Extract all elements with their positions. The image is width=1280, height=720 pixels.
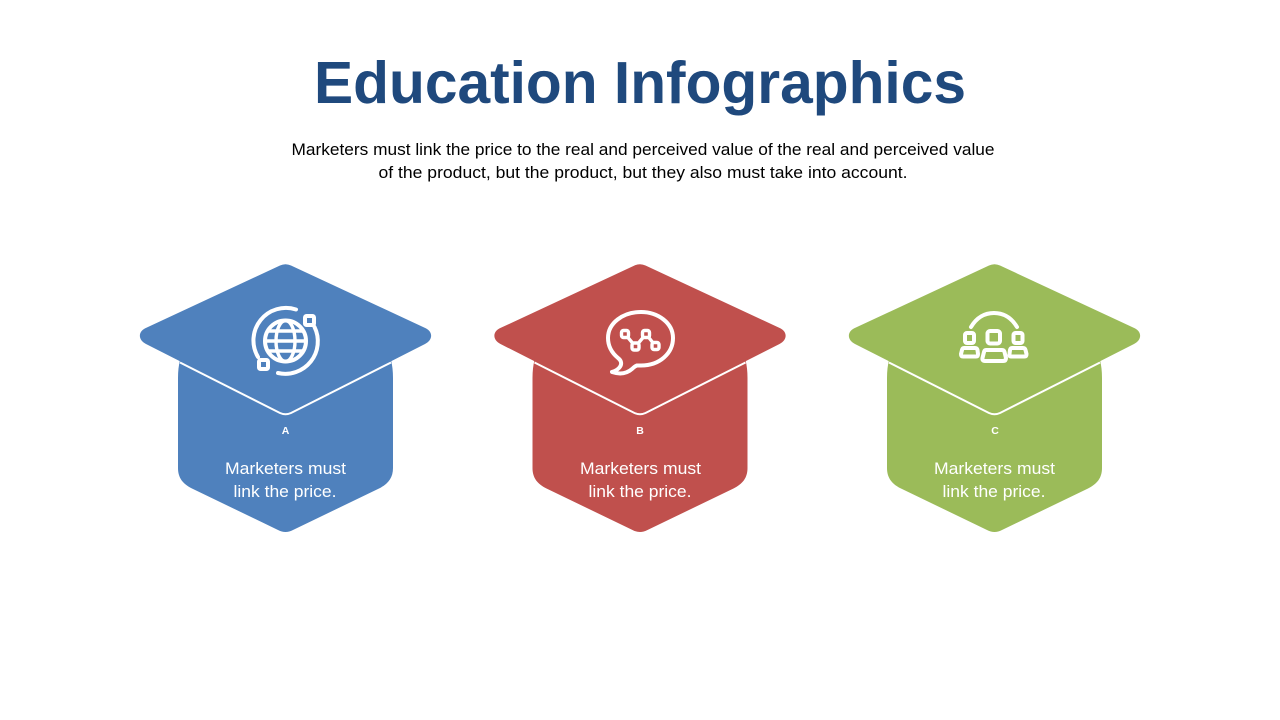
card B cap	[494, 264, 786, 414]
icon: group of people	[961, 313, 1026, 361]
label B: B	[636, 425, 644, 437]
card B body	[532, 300, 748, 532]
title: Education Infographics	[314, 50, 966, 116]
card C body	[887, 300, 1102, 532]
card C cap	[849, 264, 1140, 414]
subtitle text block: of the product, but the product, but they also must take into account.	[378, 163, 908, 182]
card B text	[580, 459, 701, 501]
card C text: Marketers must	[934, 459, 1055, 478]
label A: A	[282, 425, 290, 437]
card A body	[178, 300, 393, 532]
card A text: link the price.	[234, 482, 336, 501]
panel: card A	[140, 264, 431, 532]
subtitle text block: Marketers must link the price to the real and perceived value of the real and perceived value	[292, 140, 994, 159]
panel: card C	[849, 264, 1140, 532]
card A text	[225, 459, 346, 501]
card B cap edge line	[534, 362, 746, 414]
card A text: Marketers must	[225, 459, 346, 478]
subtitle text block	[292, 140, 994, 182]
card A cap edge line	[180, 362, 391, 414]
card C cap edge line	[889, 362, 1100, 414]
panel: card B	[494, 264, 786, 532]
icon: speech bubble with nodes	[608, 312, 673, 373]
label C: C	[991, 425, 999, 437]
card A cap	[140, 264, 431, 414]
card B text: link the price.	[588, 482, 692, 501]
card B text: Marketers must	[580, 459, 701, 478]
card C text: link the price.	[942, 482, 1046, 501]
card C text	[934, 459, 1055, 501]
icon: globe with orbit	[253, 308, 318, 374]
